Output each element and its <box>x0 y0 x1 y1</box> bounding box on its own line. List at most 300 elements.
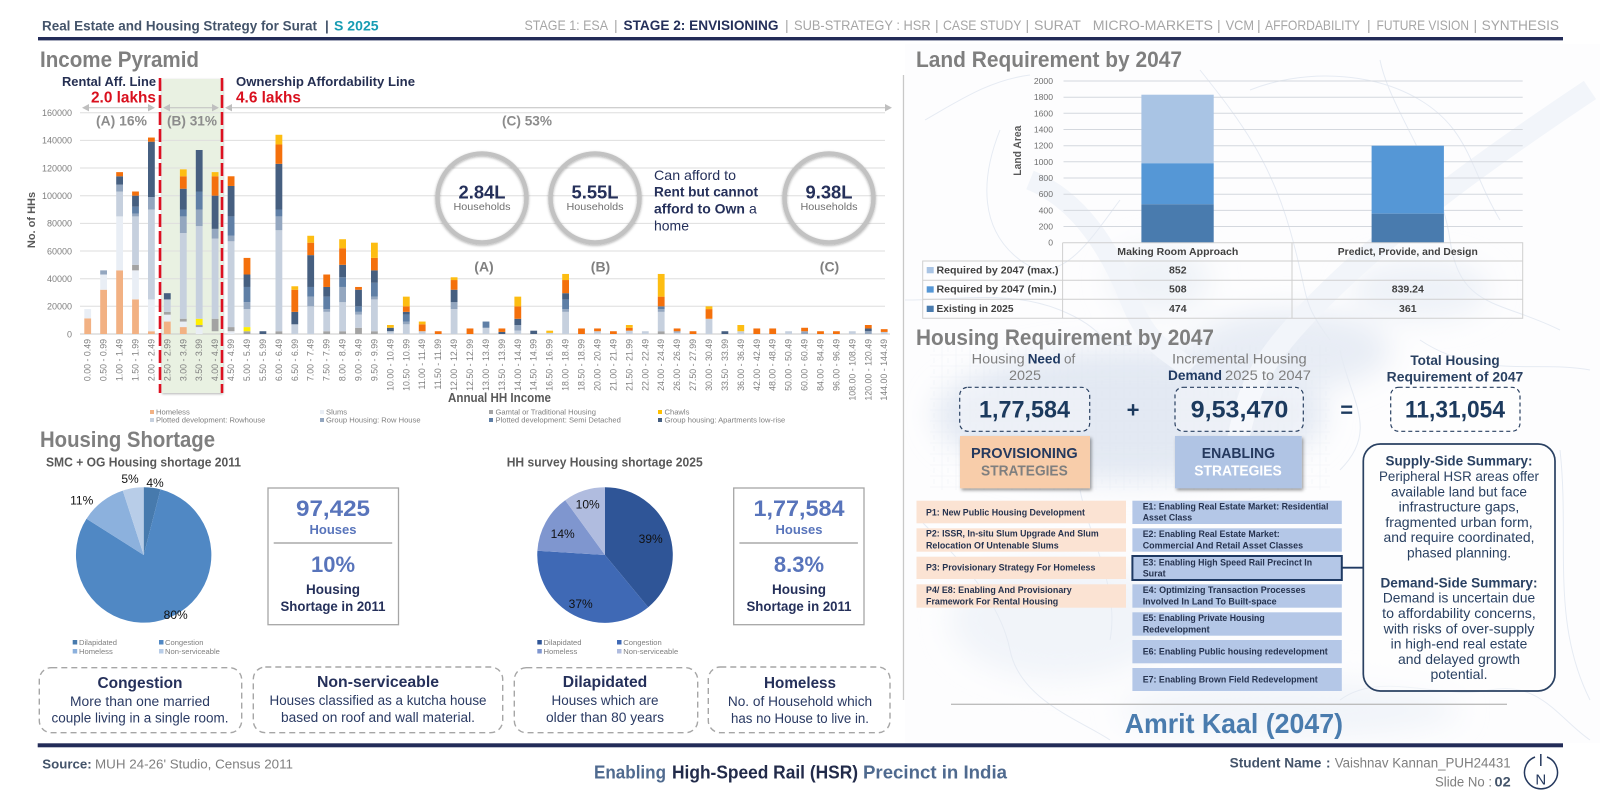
chart legend: Plotted development: Rowhouse <box>156 415 265 424</box>
rental affordability label: 2.0 lakhs <box>91 90 156 107</box>
pie legend 2011: Congestion <box>165 638 203 647</box>
y axis labels: 80000 <box>47 219 72 229</box>
definition: Homeless: Homeless <box>764 675 836 692</box>
x axis labels: 24.00 - 24.49 <box>656 339 666 391</box>
E2: E2: Enabling Real Estate Market: <box>1143 529 1280 540</box>
x axis labels: 96.00 - 96.49 <box>831 339 841 391</box>
ownership affordability label <box>236 74 415 107</box>
definition: Dilapidated: Houses which are <box>552 693 658 708</box>
x axis labels: 6.00 - 6.49 <box>274 339 284 381</box>
definition: Dilapidated: Dilapidated <box>563 674 647 691</box>
y axis labels: 40000 <box>47 274 72 284</box>
definition: Non-serviceable: based on roof and wall material. <box>281 710 475 725</box>
land data table: 361 <box>1399 303 1417 315</box>
pie chart: HH survey housing shortage 2025 <box>507 455 703 656</box>
pie legend 2025: Homeless <box>544 647 577 656</box>
land chart y axis labels: 600 <box>1039 189 1053 199</box>
chart legend: Chawls <box>664 408 690 416</box>
land data table: 852 <box>1169 264 1187 276</box>
housing need of 2025: 1,77,584 <box>979 396 1071 423</box>
stat box: 2025 shortage: 1,77,584 <box>754 496 845 521</box>
x axis labels: 5.00 - 5.49 <box>242 339 252 381</box>
x axis labels: 4.50 - 4.99 <box>226 339 236 381</box>
household count circles <box>438 154 874 275</box>
x axis labels: 7.50 - 7.99 <box>322 339 332 381</box>
definition: Congestion: couple living in a single room. <box>52 711 228 726</box>
circle B <box>550 154 640 275</box>
E1: Asset Class <box>1143 513 1192 524</box>
pie chart: HH survey housing shortage 2025: HH survey Housing shortage 2025 <box>507 455 703 470</box>
x axis labels: 5.50 - 5.99 <box>258 339 268 381</box>
definition: Homeless <box>708 667 890 733</box>
definition: Non-serviceable: Houses classified as a kutcha house <box>270 693 486 708</box>
pie chart: SMC + OG housing shortage 2011: SMC + OG Housing shortage 2011 <box>46 455 241 470</box>
x axis title: Annual HH Income <box>448 391 551 405</box>
summary callout: infrastructure gaps, <box>1399 500 1519 515</box>
land chart y axis labels: 1800 <box>1034 92 1053 102</box>
P3 <box>916 557 1126 579</box>
stat box: 2011 shortage: 10% <box>311 552 355 577</box>
land data table: Making Room Approach <box>1117 246 1238 258</box>
E4: E4: Optimizing Transaction Processes <box>1143 585 1306 596</box>
slide number: 02 <box>1494 775 1511 790</box>
share labels: (C) 53% <box>502 113 553 129</box>
stage navigation: | <box>1217 17 1221 33</box>
pie chart: SMC + OG housing shortage 2011: 5% <box>121 472 139 486</box>
heading: Amrit Kaal (2047): Amrit Kaal (2047) <box>1125 708 1343 739</box>
E2 <box>1132 528 1342 552</box>
x axis labels: 20.00 - 20.49 <box>592 339 602 391</box>
x axis labels: 22.00 - 22.49 <box>640 339 650 391</box>
P3: P3: Provisionary Strategy For Homeless <box>926 563 1095 574</box>
callout: rent but cannot own <box>654 167 758 234</box>
pie chart: SMC + OG housing shortage 2011 <box>46 455 241 656</box>
E5: E5: Enabling Private Housing <box>1143 613 1265 624</box>
E7 <box>1132 668 1342 691</box>
x axis labels: 21.00 - 21.49 <box>608 339 618 391</box>
pie legend 2025: Non-serviceable <box>623 647 678 656</box>
x axis labels: 120.00 - 120.49 <box>863 339 873 401</box>
incremental housing demand: 9,53,470 <box>1191 396 1288 423</box>
pie chart: SMC + OG housing shortage 2011: 80% <box>164 608 188 622</box>
ownership affordability line <box>221 78 223 393</box>
E5: Redevelopment <box>1143 624 1210 635</box>
header title: S 2025 <box>334 19 379 34</box>
x axis labels: 0.00 - 0.49 <box>83 339 93 381</box>
land chart y axis labels <box>1034 76 1053 248</box>
slide number: Slide No : <box>1435 775 1492 790</box>
pie chart: SMC + OG housing shortage 2011: 4% <box>146 476 164 490</box>
chart legend: Homeless <box>156 408 190 416</box>
x axis labels: 12.50 - 12.99 <box>465 339 475 391</box>
definition: Congestion <box>39 668 242 733</box>
x axis labels: 108.00 - 108.49 <box>847 339 857 401</box>
project title: Enabling <box>594 762 666 782</box>
chart legend: Group Housing: Row House <box>326 415 421 424</box>
x axis labels: 12.00 - 12.49 <box>449 339 459 391</box>
E6: E6: Enabling Public housing redevelopment <box>1143 647 1328 658</box>
land chart y axis labels: 1400 <box>1034 124 1053 134</box>
x axis labels: 13.00 - 13.49 <box>481 339 491 391</box>
y axis labels: 20000 <box>47 302 72 312</box>
x axis labels: 11.00 - 11.49 <box>417 339 427 390</box>
stage navigation: VCM <box>1226 17 1254 33</box>
y axis labels: 160000 <box>42 108 72 118</box>
project title <box>594 762 1008 782</box>
x axis labels: 42.00 - 42.49 <box>752 339 762 391</box>
x axis labels: 3.50 - 3.99 <box>194 339 204 381</box>
P4: Framework For Rental Housing <box>926 596 1058 607</box>
land data table: Required by 2047 (max.) <box>936 264 1058 276</box>
x axis labels: 2.00 - 2.49 <box>146 339 156 381</box>
P2 <box>916 528 1126 552</box>
total housing requirement <box>1387 353 1523 431</box>
x axis labels: 10.00 - 10.49 <box>385 339 395 391</box>
pie legend 2025: Congestion <box>623 638 662 647</box>
land data table: Predict, Provide, and Design <box>1338 246 1478 258</box>
x axis labels: 14.50 - 14.99 <box>529 339 539 391</box>
heading: Housing Shortage: Housing Shortage <box>40 427 215 452</box>
housing need of 2025: Housing <box>972 351 1025 366</box>
summary callout: Demand is uncertain due <box>1383 591 1535 606</box>
x axis labels: 18.00 - 18.49 <box>561 339 571 391</box>
y axis labels: 140000 <box>42 136 72 146</box>
x axis labels: 26.00 - 26.49 <box>672 339 682 391</box>
x axis labels: 6.50 - 6.99 <box>290 339 300 381</box>
definition: Dilapidated <box>514 668 698 733</box>
E4 <box>1132 584 1342 608</box>
pie chart: HH survey housing shortage 2025: 37% <box>569 597 593 611</box>
pie legend 2025: Dilapidated <box>544 638 582 647</box>
incremental housing demand: Incremental Housing <box>1172 351 1307 366</box>
stage navigation: SUB-STRATEGY : HSR <box>794 17 931 33</box>
circle A <box>438 154 526 275</box>
housing need of 2025: Need <box>1028 351 1061 366</box>
chart legend <box>150 408 785 424</box>
enabling strategies header: STRATEGIES <box>1194 463 1282 480</box>
pie chart: HH survey housing shortage 2025: 39% <box>639 532 663 546</box>
P4 <box>916 584 1126 608</box>
summary callout: and require coordinated, <box>1384 530 1534 545</box>
header title: | <box>325 19 329 34</box>
stage navigation: AFFORDABILITY <box>1265 17 1361 33</box>
total housing requirement: Requirement of 2047 <box>1387 370 1523 385</box>
x axis labels: 14.00 - 14.49 <box>513 339 523 391</box>
student name: Vaishnav Kannan_PUH24431 <box>1335 755 1511 770</box>
x axis labels: 1.00 - 1.49 <box>115 339 125 381</box>
summary callout: Supply-Side Summary: <box>1386 454 1532 469</box>
E2: Commercial And Retail Asset Classes <box>1143 541 1303 552</box>
x axis labels: 16.50 - 16.99 <box>545 339 555 391</box>
stat box: 2011 shortage: Shortage in 2011 <box>280 599 386 614</box>
rental affordability line <box>159 78 161 393</box>
circle C: Households <box>800 201 858 213</box>
stat box: 2011 shortage: Housing <box>306 582 360 597</box>
income pyramid bar chart <box>26 108 890 424</box>
pie chart: HH survey housing shortage 2025: 10% <box>576 498 600 512</box>
land requirement stacked chart <box>923 76 1523 318</box>
pie legend 2011: Dilapidated <box>79 638 117 647</box>
E5 <box>1132 612 1342 636</box>
land data table: Existing in 2025 <box>936 303 1014 315</box>
definition: Non-serviceable: Non-serviceable <box>317 674 439 691</box>
stage navigation: CASE STUDY <box>943 17 1022 33</box>
land data table: 474 <box>1169 303 1187 315</box>
incremental housing demand <box>1168 351 1311 431</box>
panel divider <box>902 75 904 700</box>
stat box: 2025 shortage <box>734 488 864 625</box>
chart gridlines <box>80 113 890 334</box>
y axis labels: 120000 <box>42 163 72 173</box>
stat box: 2025 shortage: Shortage in 2011 <box>746 599 852 614</box>
pie legend 2011: Non-serviceable <box>165 647 220 656</box>
x axis labels: 84.00 - 84.49 <box>816 339 826 391</box>
affordability lines and annotations <box>62 74 892 393</box>
x axis labels: 144.00 - 144.49 <box>879 339 889 401</box>
x axis labels: 0.50 - 0.99 <box>99 339 109 381</box>
stage navigation: | <box>1257 17 1261 33</box>
equals sign: = <box>1340 398 1353 422</box>
student name: Student Name <box>1230 755 1322 770</box>
stage navigation: FUTURE VISION <box>1376 17 1469 33</box>
callout: rent but cannot own: Rent but cannot <box>654 184 758 200</box>
summary callout: to affordability concerns, <box>1382 606 1536 621</box>
summary callout <box>1363 444 1555 691</box>
land data table: 839.24 <box>1392 284 1424 296</box>
ownership affordability label: 4.6 lakhs <box>236 90 301 107</box>
plus sign: + <box>1127 398 1139 422</box>
summary callout: and delayed growth <box>1398 652 1520 667</box>
pie legend 2011 <box>73 638 220 656</box>
definition: Dilapidated: older than 80 years <box>546 710 664 725</box>
total housing requirement: Total Housing <box>1410 353 1500 368</box>
P1: P1: New Public Housing Development <box>926 508 1086 519</box>
circle B: (B) <box>591 259 610 275</box>
callout: rent but cannot own: afford to Own <box>654 201 745 217</box>
land data table <box>923 243 1523 318</box>
provisioning strategies header <box>960 436 1090 488</box>
rental affordability label <box>62 74 156 107</box>
circle C: (C) <box>820 259 839 275</box>
heading: Land Requirement by 2047: Land Requirement by 2047 <box>916 47 1182 72</box>
x axis labels: 8.00 - 8.49 <box>338 339 348 381</box>
x axis labels: 36.00 - 36.49 <box>736 339 746 391</box>
stat box: 2011 shortage <box>268 488 398 625</box>
housing need of 2025: 2025 <box>1009 368 1041 383</box>
x axis labels: 30.00 - 30.49 <box>704 339 714 391</box>
P2: Relocation Of Untenable Slums <box>926 540 1059 551</box>
stat box: 2011 shortage: Houses <box>310 522 356 537</box>
pie chart: HH survey housing shortage 2025: 14% <box>551 527 575 541</box>
stat box: 2025 shortage: 8.3% <box>774 552 824 577</box>
chart legend: Gamtal or Traditional Housing <box>496 408 596 416</box>
bar: Making Room Approach <box>1141 95 1214 243</box>
land chart y axis labels: 400 <box>1039 205 1053 215</box>
housing need of 2025 <box>960 351 1090 431</box>
land data table: 508 <box>1169 284 1187 296</box>
header title: Real Estate and Housing Strategy for Surat <box>42 19 317 34</box>
circle C: 9.38L <box>806 182 853 202</box>
stage navigation: | <box>1026 17 1029 33</box>
rental affordability label: Rental Aff. Line <box>62 74 156 89</box>
stat box: 2011 shortage: 97,425 <box>296 496 370 521</box>
connector from E3 to summary <box>1342 567 1363 569</box>
x axis labels: 9.00 - 9.49 <box>354 339 364 381</box>
stage navigation: SURAT MICRO-MARKETS <box>1034 17 1213 33</box>
heading: Income Pyramid: Income Pyramid <box>40 47 199 72</box>
chart legend: Plotted development: Semi Detached <box>496 415 621 424</box>
x axis labels: 60.00 - 60.49 <box>800 339 810 391</box>
stage navigation: SYNTHESIS <box>1482 17 1559 33</box>
chart legend: Group housing: Apartments low-rise <box>664 415 785 424</box>
x axis labels: 27.50 - 27.99 <box>688 339 698 391</box>
circle C <box>784 154 874 275</box>
stage navigation: STAGE 1: ESA <box>524 17 609 33</box>
pie legend 2025 <box>537 638 678 656</box>
x axis labels: 7.00 - 7.49 <box>306 339 316 381</box>
x axis labels: 4.00 - 4.49 <box>210 339 220 381</box>
enabling strategies list <box>1132 501 1342 691</box>
definition: Homeless: has no House to live in. <box>731 711 869 726</box>
y axis labels: 100000 <box>42 191 72 201</box>
x axis labels: 33.50 - 33.99 <box>720 339 730 391</box>
land chart y axis labels: 1600 <box>1034 108 1053 118</box>
source line: MUH 24-26' Studio, Census 2011 <box>95 756 293 772</box>
definition: Homeless: No. of Household which <box>728 694 872 709</box>
land data table: Required by 2047 (min.) <box>936 284 1056 296</box>
chart legend: Slums <box>326 408 347 416</box>
land chart y axis title: Land Area <box>1012 125 1024 176</box>
enabling strategies header: ENABLING <box>1202 445 1275 462</box>
E1: E1: Enabling Real Estate Market: Residential <box>1143 501 1328 512</box>
stat box: 2025 shortage: Houses <box>776 522 822 537</box>
heading: Housing Requirement by 2047: Housing Requirement by 2047 <box>916 325 1214 350</box>
stat box: 2025 shortage: Housing <box>772 582 826 597</box>
summary callout: with risks of over-supply <box>1383 621 1535 636</box>
land chart y axis labels: 2000 <box>1034 76 1053 86</box>
stage navigation: | <box>614 17 618 33</box>
definition: Congestion: Congestion <box>98 675 182 692</box>
x axis labels: 10.50 - 10.99 <box>401 339 411 391</box>
land chart y axis labels: 1000 <box>1034 157 1053 167</box>
project title: Precinct in India <box>863 762 1008 782</box>
summary callout: available land but face <box>1391 484 1527 499</box>
summary callout: Demand-Side Summary: <box>1380 576 1538 591</box>
Amrit Kaal rule <box>951 703 1507 705</box>
stage navigation: | <box>1474 17 1477 33</box>
y axis labels: 60000 <box>47 246 72 256</box>
stage navigation: | <box>935 17 939 33</box>
ownership affordability label: Ownership Affordability Line <box>236 74 415 89</box>
x axis labels <box>83 339 889 401</box>
x axis labels: 21.50 - 21.99 <box>624 339 634 391</box>
summary callout: fragmented urban form, <box>1385 515 1533 530</box>
summary callout: Peripheral HSR areas offer <box>1379 469 1539 484</box>
share labels <box>96 113 553 129</box>
E6 <box>1132 640 1342 663</box>
land chart y axis labels: 800 <box>1039 173 1053 183</box>
circle B: Households <box>566 201 624 213</box>
y axis title: No. of HHs <box>26 192 38 248</box>
E3 highlighted: Surat <box>1143 569 1166 580</box>
icon: north arrow <box>1525 754 1557 789</box>
pie legend 2011: Homeless <box>79 647 113 656</box>
definition: Congestion: More than one married <box>70 694 210 709</box>
background map of Surat <box>905 44 1600 743</box>
P1 <box>916 501 1126 523</box>
project title: High-Speed Rail (HSR) <box>672 762 858 782</box>
x axis labels: 48.00 - 48.49 <box>768 339 778 391</box>
summary callout: in high-end real estate <box>1391 637 1527 652</box>
E4: Involved In Land To Built-space <box>1143 596 1277 607</box>
share labels: (A) 16% <box>96 113 148 129</box>
y axis labels <box>42 108 72 339</box>
share arrows <box>82 104 892 111</box>
provisioning strategies list <box>916 501 1126 608</box>
land chart y axis labels: 1200 <box>1034 141 1053 151</box>
callout: rent but cannot own: home <box>654 218 689 234</box>
P2: P2: ISSR, In-situ Slum Upgrade And Slum <box>926 529 1099 540</box>
header <box>38 17 1563 40</box>
x axis labels: 3.00 - 3.49 <box>178 339 188 381</box>
stage navigation: | <box>785 17 789 33</box>
circle A: (A) <box>474 259 494 275</box>
land chart gridlines <box>1064 81 1523 226</box>
circle A: Households <box>454 201 510 213</box>
x axis labels: 11.50 - 11.99 <box>433 339 443 390</box>
E7: E7: Enabling Brown Field Redevelopment <box>1143 674 1318 685</box>
provisioning strategies header: PROVISIONING <box>971 445 1078 462</box>
x axis labels: 1.50 - 1.99 <box>130 339 140 381</box>
E3 highlighted: E3: Enabling High Speed Rail Precinct In <box>1143 558 1312 569</box>
callout: rent but cannot own: Can afford to <box>654 167 736 183</box>
x axis labels: 13.50 - 13.99 <box>497 339 507 391</box>
share labels: (B) 31% <box>167 113 218 129</box>
incremental housing demand: 2025 to 2047 <box>1225 368 1311 383</box>
pie chart: SMC + OG housing shortage 2011: 11% <box>70 494 94 508</box>
bar: Predict, Provide, and Design <box>1372 146 1444 243</box>
land chart y axis labels: 200 <box>1039 222 1053 232</box>
stage navigation: STAGE 2: ENVISIONING <box>624 17 779 33</box>
green band: rental-only households <box>162 79 223 393</box>
stage navigation: | <box>1367 17 1371 33</box>
source line: Source: <box>42 756 92 772</box>
circle B: 5.55L <box>572 182 619 202</box>
summary callout: potential. <box>1430 667 1488 682</box>
E1 <box>1132 501 1342 524</box>
footer <box>38 743 1563 790</box>
stacked bars <box>84 135 888 334</box>
total housing requirement: 11,31,054 <box>1405 396 1506 423</box>
icon: north arrow: N <box>1535 772 1546 788</box>
x axis labels: 50.00 - 50.49 <box>784 339 794 391</box>
x axis labels: 9.50 - 9.99 <box>369 339 379 381</box>
callout: rent but cannot own: a <box>749 201 757 217</box>
incremental housing demand: Demand <box>1168 368 1222 383</box>
E3 highlighted <box>1132 556 1342 580</box>
student name: : <box>1326 755 1330 770</box>
x axis labels: 2.50 - 2.99 <box>162 339 172 381</box>
provisioning strategies header: STRATEGIES <box>981 463 1068 480</box>
y axis labels: 0 <box>67 329 72 339</box>
land chart y axis labels: 0 <box>1048 238 1053 248</box>
circle A: 2.84L <box>458 182 506 202</box>
housing need of 2025: of <box>1064 351 1076 366</box>
summary callout: phased planning. <box>1407 545 1511 560</box>
stage navigation <box>524 17 1559 33</box>
P4: P4/ E8: Enabling And Provisionary <box>926 585 1072 596</box>
definition: Non-serviceable <box>253 667 503 733</box>
